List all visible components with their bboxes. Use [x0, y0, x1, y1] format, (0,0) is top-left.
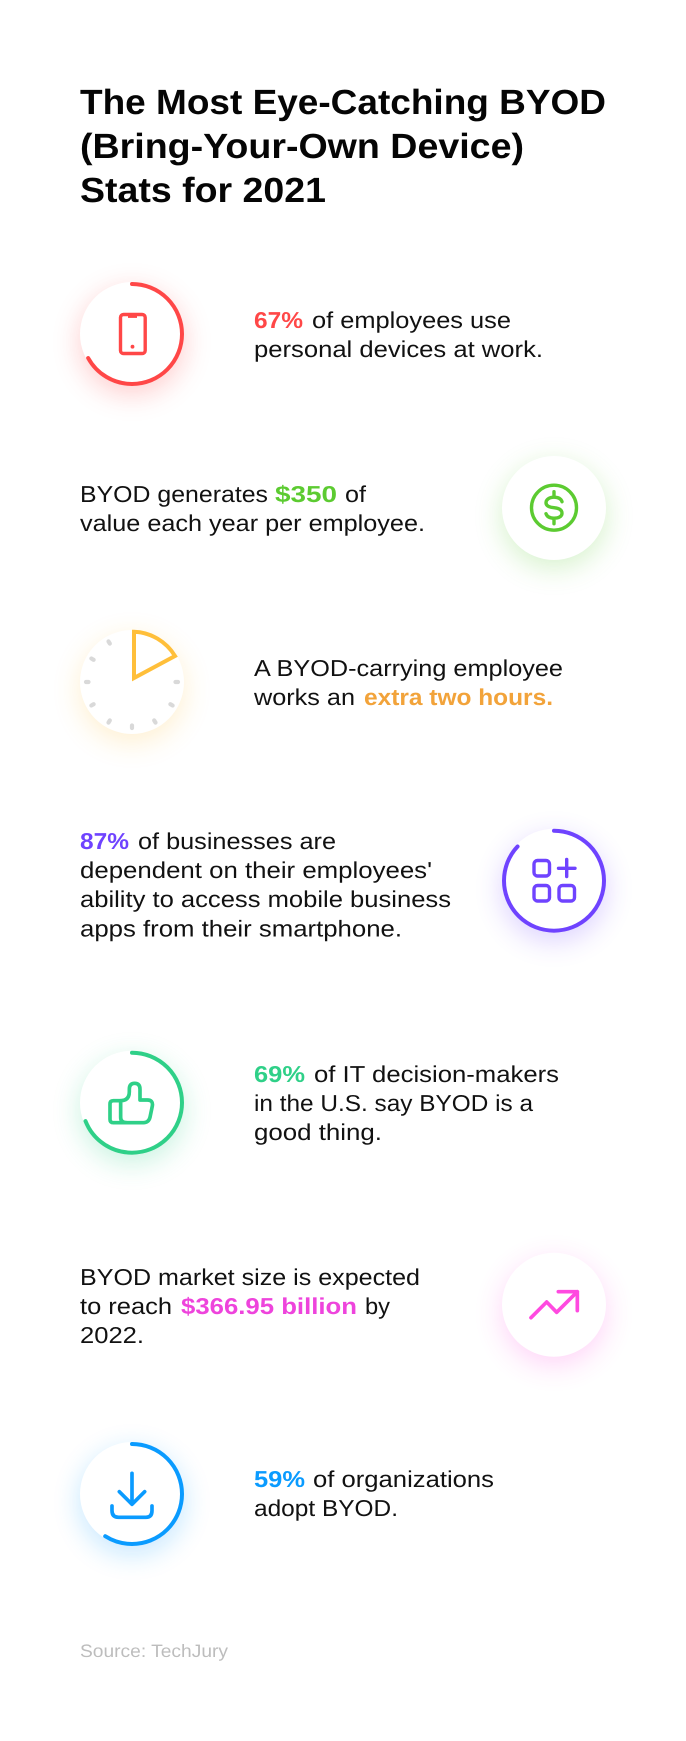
icon: apps grid in 87% ring [502, 829, 606, 941]
text: market size $366.95 billion: to reach [80, 1293, 172, 1319]
icon: trending up arrow [502, 1253, 606, 1365]
icon: thumbs up in 69% ring [80, 1051, 184, 1163]
text: BYOD-carrying employee: extra two hours. [364, 684, 553, 710]
text: BYOD-carrying employee: A BYOD-carrying employee [254, 655, 563, 681]
icon: smartphone in 67% ring [80, 282, 184, 394]
text: 87% of businesses: ability to access mobile business [80, 886, 451, 912]
text: 59% of organizations: 59% [254, 1466, 305, 1492]
title: The Most Eye-Catching BYOD [80, 83, 606, 122]
title: (Bring-Your-Own Device) [80, 127, 524, 166]
text: 67% of employees: 67% [254, 307, 303, 333]
text: 69% of IT decision-makers: in the U.S. say BYOD is a [254, 1090, 533, 1116]
text: market size $366.95 billion: $366.95 billion [181, 1293, 357, 1319]
text: 87% of businesses [80, 828, 451, 942]
text: 67% of employees: personal devices at work. [254, 336, 543, 362]
text: 69% of IT decision-makers: good thing. [254, 1119, 382, 1145]
text: market size $366.95 billion: BYOD market size is expected [80, 1264, 420, 1290]
text: 67% of employees [254, 307, 543, 362]
text: BYOD generates $350: of [345, 481, 367, 507]
stat 1: personal devices [80, 282, 543, 394]
text: 87% of businesses: dependent on their employees' [80, 857, 432, 883]
text: BYOD generates $350 [80, 481, 425, 536]
text: BYOD generates $350: BYOD generates [80, 481, 268, 507]
stat 2: value per employee [80, 456, 606, 568]
stat 5: IT decision-makers [80, 1051, 559, 1163]
text: 87% of businesses: of businesses are [138, 828, 336, 854]
icon: clock with two-hour wedge [80, 630, 184, 742]
text: 59% of organizations: adopt BYOD. [254, 1495, 398, 1521]
stat 4: mobile business apps [80, 828, 606, 942]
text: 69% of IT decision-makers: of IT decision-makers [314, 1061, 559, 1087]
text: BYOD generates $350: $350 [275, 481, 337, 507]
icon: download in 59% ring [80, 1442, 184, 1554]
icon: dollar coin [502, 456, 606, 568]
text: market size $366.95 billion: by [365, 1293, 391, 1319]
stat 6: market size [80, 1253, 606, 1365]
stat 7: organizations adopt [80, 1442, 494, 1554]
source: Source: TechJury [80, 1641, 228, 1661]
text: market size $366.95 billion [80, 1264, 420, 1348]
text: 69% of IT decision-makers [254, 1061, 559, 1145]
title: Stats for 2021 [80, 171, 326, 210]
text: BYOD-carrying employee [253, 655, 563, 710]
text: 69% of IT decision-makers: 69% [254, 1061, 305, 1087]
text: BYOD-carrying employee: works an [253, 684, 355, 710]
text: 59% of organizations [254, 1466, 494, 1521]
text: market size $366.95 billion: 2022. [80, 1322, 144, 1348]
text: 87% of businesses: apps from their smartphone. [80, 916, 402, 942]
title [80, 83, 606, 210]
stat 3: extra two hours [80, 630, 563, 742]
text: BYOD generates $350: value each year per employee. [80, 510, 425, 536]
text: 67% of employees: of employees use [312, 307, 511, 333]
text: 59% of organizations: of organizations [313, 1466, 494, 1492]
text: 87% of businesses: 87% [80, 828, 129, 854]
